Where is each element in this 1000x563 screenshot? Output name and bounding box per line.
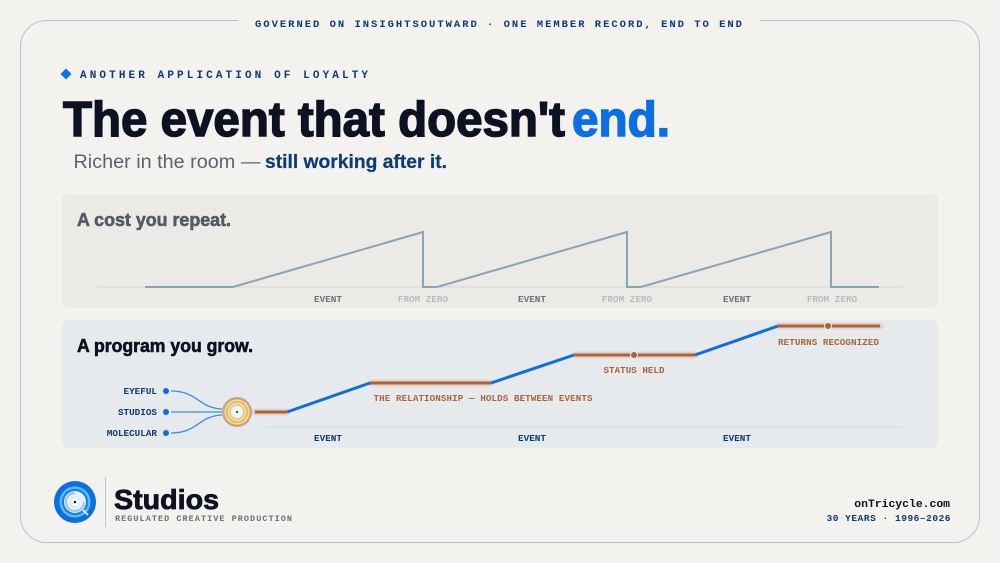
event labels: EVENT: [723, 433, 751, 444]
subtitle: Richer in the room —: [74, 152, 260, 173]
source labels: [107, 386, 157, 439]
source labels: MOLECULAR: [107, 428, 157, 439]
event labels: [314, 433, 751, 444]
title: The event that doesn't: [63, 93, 565, 147]
subtitle: [74, 152, 447, 173]
copper labels: [374, 337, 879, 404]
event and from zero labels: FROM ZERO: [807, 294, 858, 305]
title: end.: [572, 93, 670, 147]
eyebrow: [60, 68, 368, 82]
hub icon: [222, 397, 252, 427]
source dots: [163, 388, 169, 436]
source connectors: [171, 391, 222, 433]
source labels: STUDIOS: [118, 407, 157, 418]
panel heading: A program you grow.: [77, 336, 253, 356]
source labels: EYEFUL: [124, 386, 157, 397]
milestone dots: [630, 322, 832, 358]
site name: onTricycle.com: [854, 499, 950, 511]
copper labels: STATUS HELD: [604, 365, 665, 376]
sawtooth cost chart: [145, 232, 879, 287]
event and from zero labels: [314, 294, 858, 305]
event and from zero labels: EVENT: [314, 294, 342, 305]
panel: a program you grow: [62, 320, 938, 448]
top banner: GOVERNED ON INSIGHTSOUTWARD · ONE MEMBER RECORD, END TO END: [255, 19, 742, 31]
icon: diamond: [60, 68, 72, 80]
copper labels: RETURNS RECOGNIZED: [778, 337, 879, 348]
event and from zero labels: FROM ZERO: [398, 294, 449, 305]
copper labels: THE RELATIONSHIP — HOLDS BETWEEN EVENTS: [374, 393, 593, 404]
brand tagline: REGULATED CREATIVE PRODUCTION: [115, 514, 292, 524]
brand logo: [54, 481, 96, 523]
event and from zero labels: FROM ZERO: [602, 294, 653, 305]
brand name: Studios: [114, 484, 219, 515]
event and from zero labels: EVENT: [723, 294, 751, 305]
relationship held line: [255, 326, 880, 412]
panel: a cost you repeat: [62, 194, 938, 308]
event labels: EVENT: [518, 433, 546, 444]
subtitle: still working after it.: [265, 152, 447, 173]
copper halos: [255, 326, 880, 412]
panel heading: A cost you repeat.: [77, 210, 231, 230]
growth line: [287, 326, 778, 412]
years line: 30 YEARS · 1996–2026: [826, 513, 951, 524]
event and from zero labels: EVENT: [518, 294, 546, 305]
eyebrow text: ANOTHER APPLICATION OF LOYALTY: [80, 70, 368, 82]
event labels: EVENT: [314, 433, 342, 444]
